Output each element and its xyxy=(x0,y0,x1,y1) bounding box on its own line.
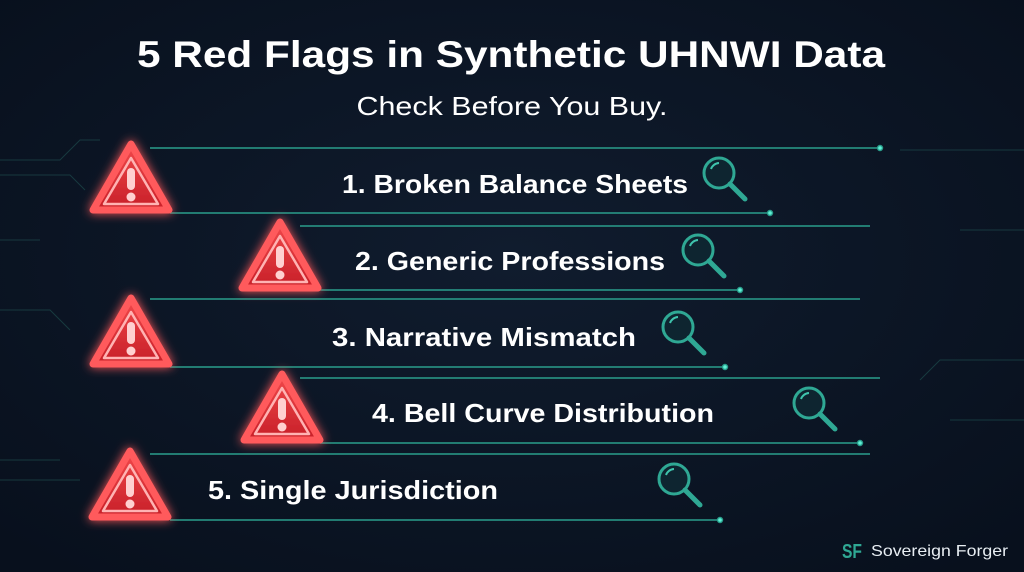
row 3 xyxy=(93,298,704,364)
logo: Sovereign Forger xyxy=(871,543,1009,560)
row 1 xyxy=(93,144,745,210)
label 2: 2. Generic Professions xyxy=(355,246,665,276)
icon: warning 5 xyxy=(92,451,168,517)
label 3: 3. Narrative Mismatch xyxy=(332,322,636,352)
icon: warning 3 xyxy=(93,298,169,364)
icon: warning 1 xyxy=(93,144,169,210)
icon: magnifier 4 xyxy=(794,388,835,429)
subtitle: Check Before You Buy. xyxy=(356,91,668,121)
logo xyxy=(842,541,1009,563)
row 4 xyxy=(244,374,835,440)
icon: warning 2 xyxy=(242,222,318,288)
row 5 xyxy=(92,451,700,517)
title: 5 Red Flags in Synthetic UHNWI Data xyxy=(137,34,885,75)
icon: magnifier 2 xyxy=(683,235,724,276)
label 5: 5. Single Jurisdiction xyxy=(208,475,498,505)
icon: magnifier 1 xyxy=(704,158,745,199)
label 1: 1. Broken Balance Sheets xyxy=(342,169,688,199)
row 2 xyxy=(242,222,724,288)
icon: magnifier 5 xyxy=(659,464,700,505)
logo: SF xyxy=(842,541,862,563)
icon: warning 4 xyxy=(244,374,320,440)
label 4: 4. Bell Curve Distribution xyxy=(372,398,714,428)
icon: magnifier 3 xyxy=(663,312,704,353)
